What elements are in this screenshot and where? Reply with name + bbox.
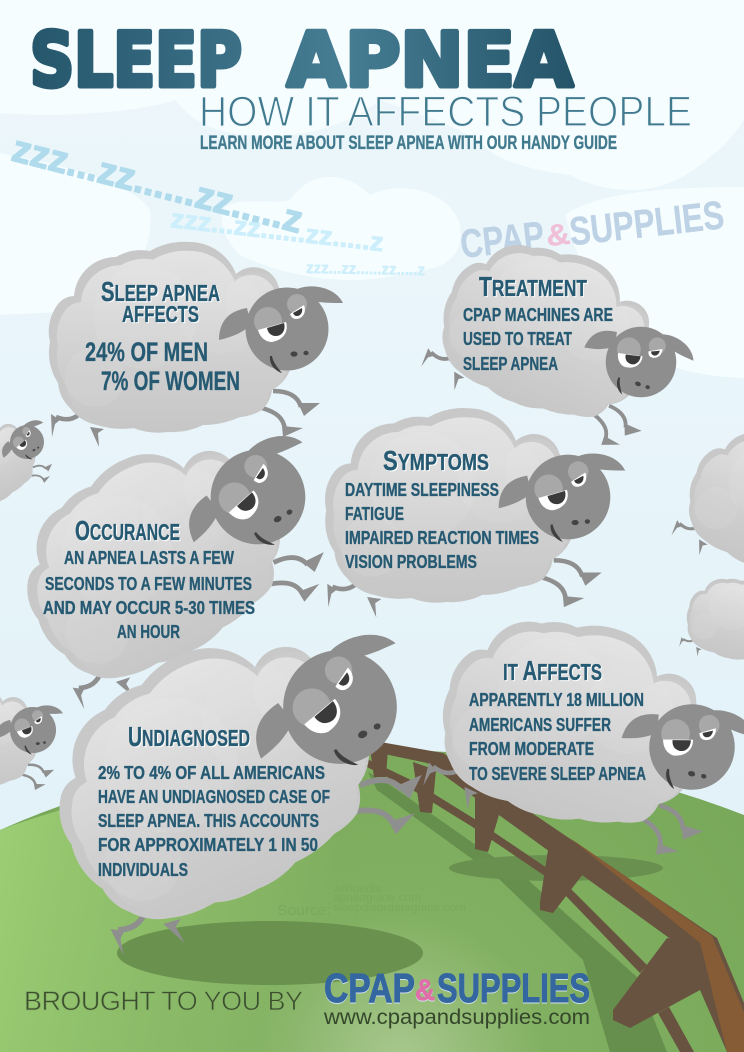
text [43, 548, 255, 642]
shadow: right sheep [449, 855, 663, 881]
heading: OCCURANCE [75, 515, 180, 546]
heading [101, 276, 220, 327]
sources: apneaguide.com [333, 892, 421, 904]
sources: sleepdisordersguide.com [333, 902, 466, 914]
text [469, 690, 646, 784]
sheep panel: occurance [0, 399, 344, 720]
sources: wikipedia [332, 883, 383, 895]
text: SECONDS TO A FEW MINUTES [45, 574, 252, 594]
brought to you by: BROUGHT TO YOU BY [24, 986, 303, 1016]
sheep panel: symptoms [325, 408, 625, 617]
text: AN APNEA LASTS A FEW [64, 548, 234, 568]
text: DAYTIME SLEEPINESS [345, 480, 499, 500]
text: IMPAIRED REACTION TIMES [345, 528, 539, 548]
website url: www.cpapandsupplies.com [323, 1006, 590, 1029]
sources [277, 883, 466, 919]
title: APNEA [287, 16, 573, 104]
statistics: 7% OF WOMEN [101, 366, 240, 396]
text: FROM MODERATE [469, 739, 594, 759]
text: INDIVIDUALS [98, 860, 188, 880]
statistics: 24% OF MEN [85, 337, 208, 367]
watermark logo: & [544, 218, 572, 253]
text: AND MAY OCCUR 5-30 TIMES [43, 598, 255, 618]
small sheep: lower left [0, 680, 69, 805]
partial sheep: right lower [677, 565, 744, 684]
sheep panel: affects [49, 242, 343, 447]
sheep panel: treatment [415, 213, 714, 473]
heading: AFFECTS [122, 301, 199, 327]
text: HAVE AN UNDIAGNOSED CASE OF [98, 787, 330, 807]
text: FOR APPROXIMATELY 1 IN 50 [98, 835, 318, 855]
heading: TREATMENT [479, 271, 587, 302]
watermark logo [458, 193, 726, 267]
footer logo: & [415, 974, 435, 1007]
text: AN HOUR [117, 622, 180, 642]
hill [0, 750, 744, 1052]
text: APPARENTLY 18 MILLION [469, 690, 644, 710]
heading: UNDIAGNOSED [128, 721, 250, 752]
text: TO SEVERE SLEEP APNEA [469, 764, 646, 784]
heading: SYMPTOMS [383, 445, 489, 476]
sheep panel: undiagnosed [17, 585, 445, 969]
subtitle: HOW IT AFFECTS PEOPLE [199, 89, 692, 136]
text: SLEEP APNEA [463, 354, 558, 374]
shadow: hill sheep [117, 921, 423, 985]
text: AMERICANS SUFFER [469, 715, 611, 735]
text: CPAP MACHINES ARE [463, 305, 613, 325]
title [30, 16, 573, 104]
statistics [85, 337, 240, 396]
text [463, 305, 613, 374]
sheep panel: it affects [417, 588, 744, 876]
title: SLEEP [30, 16, 242, 104]
footer logo [324, 965, 590, 1011]
zzz trail 2: zzz...zz......zz.....z [169, 203, 385, 257]
sources: Source: [277, 902, 331, 919]
zzz trail 1: zzz...zz......zz.....z [8, 128, 307, 242]
text [98, 763, 330, 880]
text: VISION PROBLEMS [345, 552, 477, 572]
text: 2% TO 4% OF ALL AMERICANS [98, 763, 325, 783]
footer logo: CPAP [324, 965, 415, 1011]
heading: SLEEP APNEA [101, 276, 220, 307]
text: USED TO TREAT [463, 329, 572, 349]
text: SLEEP APNEA. THIS ACCOUNTS [98, 811, 319, 831]
watermark logo: CPAP [458, 214, 546, 267]
text [345, 480, 539, 572]
footer logo: SUPPLIES [437, 965, 590, 1011]
zzz trail 3: zzz...zz......zz.....z [306, 260, 425, 279]
small sheep: upper left [0, 400, 68, 527]
text: FATIGUE [345, 504, 404, 524]
partial sheep: right upper [667, 407, 744, 623]
fence [365, 742, 744, 1052]
heading: IT AFFECTS [503, 655, 602, 686]
